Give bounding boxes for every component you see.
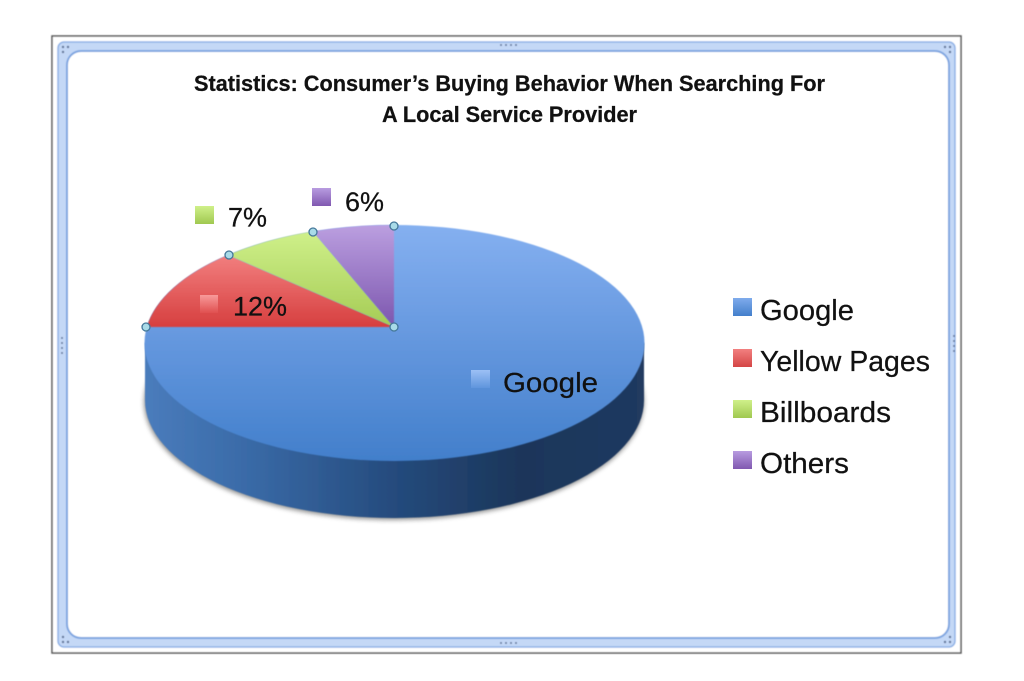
legend: Others xyxy=(760,448,849,480)
data label: 6% xyxy=(312,187,384,217)
pie side wall xyxy=(145,343,644,518)
slice: Yellow Pages 12% xyxy=(147,255,394,327)
title: A Local Service Provider xyxy=(382,102,637,127)
slice: Google xyxy=(144,225,644,461)
title xyxy=(194,71,825,127)
legend xyxy=(733,295,930,480)
data label: 7%: 7% xyxy=(228,202,267,232)
data label: Google: Google xyxy=(503,367,598,398)
data label: 12%: 12% xyxy=(233,292,287,322)
data label: 6%: 6% xyxy=(345,187,384,217)
slice: Others 6% xyxy=(313,225,394,327)
data label: 7% xyxy=(195,202,267,232)
resize handles xyxy=(61,44,955,644)
selection handles xyxy=(142,222,398,331)
slice: Billboards 7% xyxy=(228,231,394,327)
legend: Yellow Pages xyxy=(760,346,930,378)
data label: 12% xyxy=(200,292,287,322)
legend: Google xyxy=(760,295,854,327)
legend: Billboards xyxy=(760,397,891,429)
title: Statistics: Consumer’s Buying Behavior When Searching For xyxy=(194,71,825,96)
pie chart xyxy=(142,222,644,520)
